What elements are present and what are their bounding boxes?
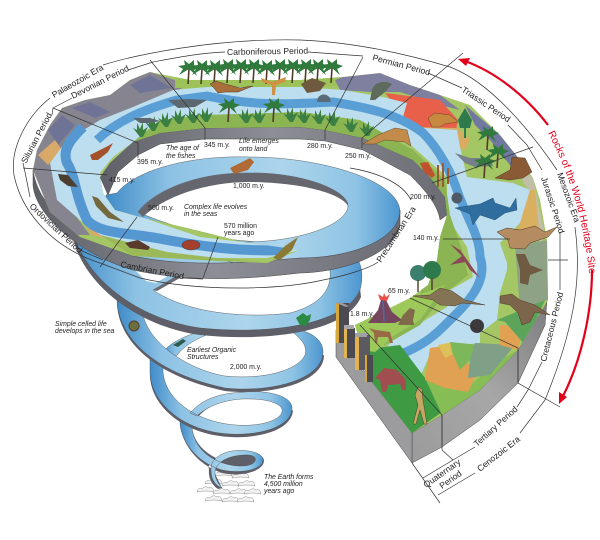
- reeds: [438, 163, 448, 187]
- animal: horse: [369, 328, 393, 343]
- animal: grey dinosaur: [455, 153, 493, 167]
- spiral ribbon: back of third coil: [161, 329, 228, 361]
- animal: turtle: [182, 240, 200, 250]
- animal: shrimp: [90, 143, 113, 160]
- italic caption: earth forms: years ago: [263, 488, 294, 495]
- animal: brown dinosaur: [495, 157, 532, 180]
- age labels: 1.8 m.y.: [350, 311, 374, 318]
- age labels: 415 m.y.: [109, 177, 135, 184]
- age labels: 280 m.y.: [307, 143, 333, 150]
- animal: crab: [420, 162, 435, 178]
- period and era labels: Period: [437, 468, 464, 491]
- block side faces: [336, 300, 547, 463]
- animal: ammonite: [452, 192, 462, 204]
- second river: [65, 127, 285, 250]
- spiral ribbon: lowest coil: [180, 418, 264, 489]
- italic caption: complex life: Complex life evolves: [184, 204, 248, 211]
- age labels: 65 m.y.: [388, 288, 410, 295]
- palm forest: [178, 59, 343, 84]
- period and era labels: Quaternary: [421, 456, 463, 490]
- italic caption: earth forms: The Earth forms: [264, 474, 314, 481]
- fossil icons on spiral: [129, 313, 311, 347]
- age labels: [109, 142, 439, 371]
- tan shore patches: [38, 140, 105, 238]
- period and era labels: Silurian Period: [19, 111, 54, 165]
- animal: mammoth: [375, 368, 406, 392]
- animal: reptile: [301, 78, 326, 93]
- period and era labels: Ordovician Period: [28, 201, 85, 255]
- age labels: 500 m.y.: [148, 205, 174, 212]
- period and era labels: [19, 46, 582, 491]
- italic caption: earliest organic structures: Earliest Organic: [187, 347, 237, 354]
- period and era labels: Tertiary Period: [472, 404, 520, 448]
- animal: shell: [317, 95, 331, 102]
- italic caption: simple celled life: develops in the sea: [55, 328, 115, 335]
- water body: [50, 87, 530, 377]
- red arrow: upper: [458, 58, 548, 125]
- animal: eel: [92, 196, 124, 222]
- light land volcano plain: [355, 285, 445, 352]
- red lava field: [385, 93, 458, 130]
- animal: sauropod: [413, 288, 485, 306]
- front land: [370, 345, 441, 433]
- plants along inner ring: [133, 98, 374, 137]
- main ribbon outer wall: [33, 170, 400, 279]
- ring inner wall: [138, 173, 348, 217]
- period and era labels: Devonian Period: [69, 63, 131, 101]
- animal: buffalo: [428, 113, 458, 127]
- animal: small fish: [133, 118, 160, 123]
- left inner shore: [100, 164, 232, 240]
- animal: log fossil: [230, 158, 254, 174]
- age labels: 570 million: [224, 223, 257, 230]
- green back plant strip: [133, 112, 468, 345]
- period and era labels: Precambrian Era: [374, 204, 418, 264]
- spiral ribbon: fourth coil: [150, 356, 293, 437]
- period and era labels: Carboniferous Period: [227, 46, 308, 57]
- animal: T. rex: [500, 294, 550, 325]
- animal: slug: [125, 240, 150, 250]
- animal: dragonfly: [261, 77, 286, 95]
- red arrow: lower: [559, 270, 592, 404]
- animal: eel two: [273, 237, 298, 260]
- earth clouds: [197, 463, 261, 502]
- land ring inner wall: [100, 127, 447, 220]
- small palms: [474, 126, 509, 178]
- italic caption: earth forms: 4,500 million: [264, 481, 303, 488]
- spiral ribbon: third coil: [117, 300, 324, 392]
- period and era labels: Mesozoic Era: [555, 171, 582, 224]
- purple ridges: [48, 75, 172, 145]
- italic caption: complex life: in the seas: [184, 211, 218, 218]
- period and era labels: Cenozoic Era: [475, 434, 522, 474]
- river mid blue: [97, 96, 482, 357]
- mountains right: [465, 105, 520, 165]
- age labels: years ago: [224, 230, 254, 237]
- animal: ichthyosaur: [455, 198, 517, 225]
- red heading: Rocks of the World Heritage Site: [548, 130, 596, 274]
- city buildings: [336, 302, 373, 382]
- italic caption: life emerges: onto land: [239, 146, 269, 153]
- lower green slope: [425, 350, 518, 415]
- period and era labels: Palaeozoic Era: [50, 62, 105, 100]
- volcano: [368, 293, 402, 323]
- tree: [458, 108, 472, 138]
- tan right strip: [422, 127, 470, 150]
- period and era labels: Jurassic Period: [539, 176, 567, 235]
- land top green: [175, 77, 340, 88]
- age labels: 2,000 m.y.: [230, 364, 262, 371]
- trees: [410, 261, 441, 292]
- italic caption: age of fishes: The age of: [166, 145, 200, 152]
- italic caption: earliest organic structures: Structures: [187, 354, 219, 361]
- age labels: 345 m.y.: [204, 142, 230, 149]
- mountains top right: [335, 73, 460, 110]
- period and era labels: Triassic Period: [460, 84, 513, 124]
- period and era labels: Cambrian Period: [120, 259, 185, 281]
- blue Precambrian ring: [105, 157, 400, 264]
- animal: kangaroo: [398, 308, 415, 325]
- canyon: [425, 345, 478, 392]
- animal: turtle grey: [370, 82, 392, 100]
- age labels: 200 m.y.: [410, 194, 436, 201]
- period and era labels: Cretaceous Period: [538, 291, 565, 362]
- age labels: 395 m.y.: [137, 159, 163, 166]
- italic caption: age of fishes: the fishes: [166, 153, 196, 160]
- animal: raptor: [516, 254, 543, 285]
- italic caption: simple celled life: Simple celled life: [55, 321, 107, 328]
- animal: pterosaur: [450, 244, 480, 278]
- animal: stegosaur: [497, 226, 557, 249]
- period and era labels: Permian Period: [371, 52, 431, 77]
- animal: amphibian: [210, 81, 253, 93]
- mountains left: [30, 72, 190, 235]
- animal: fish: [168, 99, 207, 108]
- landscape surface: [33, 72, 548, 433]
- human figure: [413, 387, 427, 424]
- meteor: [470, 319, 484, 333]
- age labels: 1,000 m.y.: [233, 183, 265, 190]
- animal: trilobite: [58, 174, 78, 187]
- age labels: 250 m.y.: [345, 153, 371, 160]
- italic caption: life emerges: Life emerges: [239, 138, 279, 145]
- animal: anteater: [363, 128, 411, 146]
- age labels: 140 m.y.: [413, 235, 439, 242]
- spiral ribbon: second coil: [72, 225, 362, 337]
- lower outer green strip: [100, 235, 267, 262]
